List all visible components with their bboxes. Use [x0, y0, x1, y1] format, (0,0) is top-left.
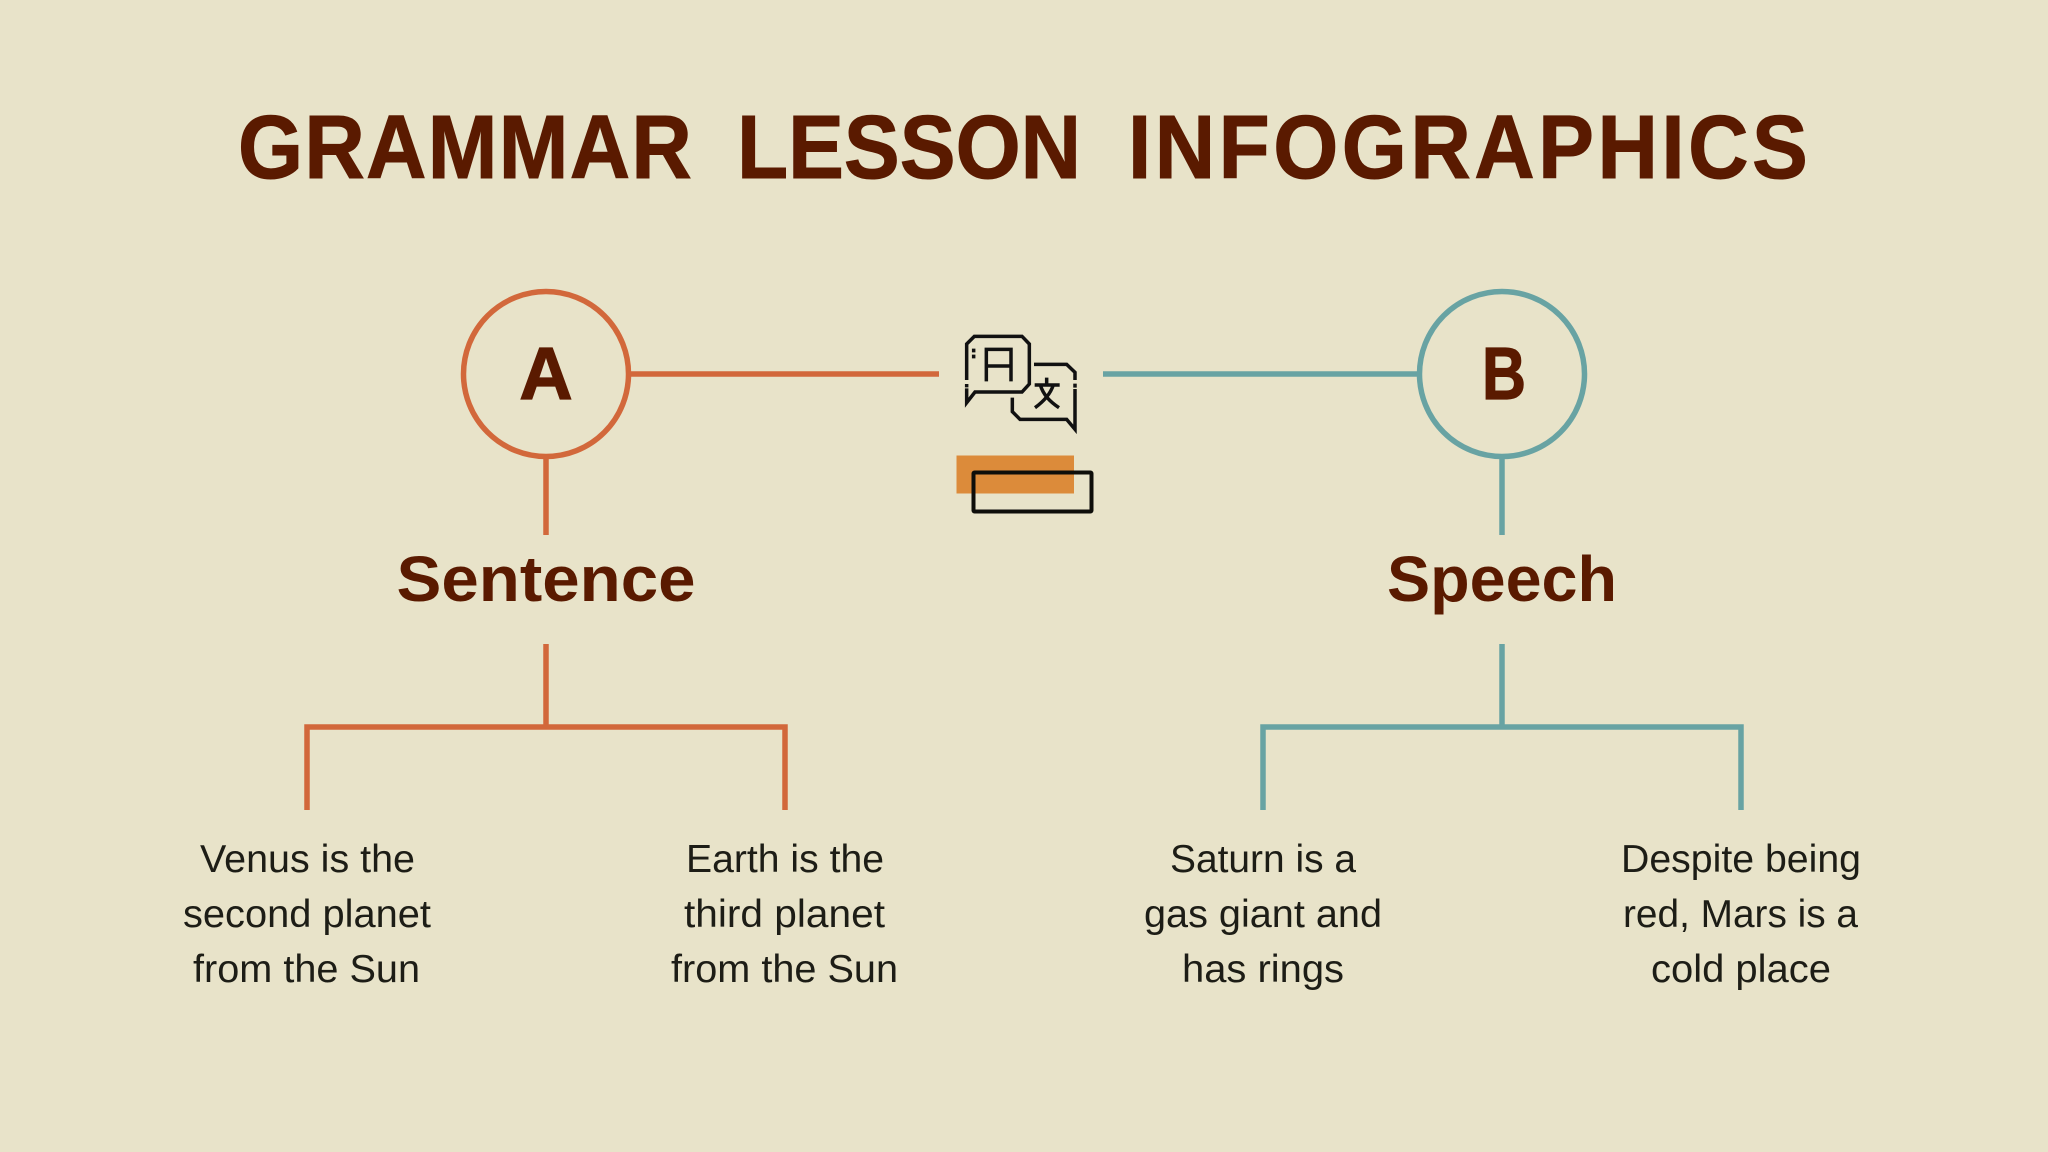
decorative label block [956, 456, 1092, 512]
text: Venus [183, 838, 431, 991]
heading: Sentence: Sentence [396, 543, 696, 615]
tree connector: Sentence [307, 644, 785, 810]
panel: B Speech [1144, 292, 1861, 991]
title: GRAMMAR [238, 97, 692, 198]
connector: A to icon [629, 371, 939, 377]
text: Earth: Earth is the [686, 838, 884, 881]
circle badge B: B [1482, 332, 1526, 415]
text: Saturn: Saturn is a [1170, 838, 1356, 881]
tree connector: Speech [1263, 644, 1741, 810]
connector: badge A to heading [543, 457, 549, 535]
text: Earth: third planet [684, 893, 885, 936]
text: Mars: Despite being [1621, 838, 1861, 881]
title: INFOGRAPHICS [1128, 97, 1808, 198]
text: Venus: Venus is the [200, 838, 415, 881]
title: LESSON [737, 97, 1081, 198]
icon: translation speech bubbles [967, 336, 1075, 429]
panel: A Sentence [183, 292, 898, 991]
text: Saturn [1144, 838, 1382, 991]
text: Mars: red, Mars is a [1623, 893, 1858, 936]
text: Mars: cold place [1651, 948, 1831, 991]
circle badge B [1420, 292, 1584, 456]
text: Mars [1621, 838, 1861, 991]
title [238, 97, 1808, 198]
connector: B to icon [1103, 371, 1420, 377]
text: Earth: from the Sun [671, 948, 898, 991]
circle badge A [464, 292, 628, 456]
text: Venus: from the Sun [193, 948, 420, 991]
text: Saturn: gas giant and [1144, 893, 1382, 936]
text: Saturn: has rings [1182, 948, 1344, 991]
circle badge A: A [519, 332, 573, 415]
text: Venus: second planet [183, 893, 431, 936]
heading: Speech: Speech [1387, 543, 1617, 615]
connector: badge B to heading [1499, 457, 1505, 535]
text: Earth [671, 838, 898, 991]
